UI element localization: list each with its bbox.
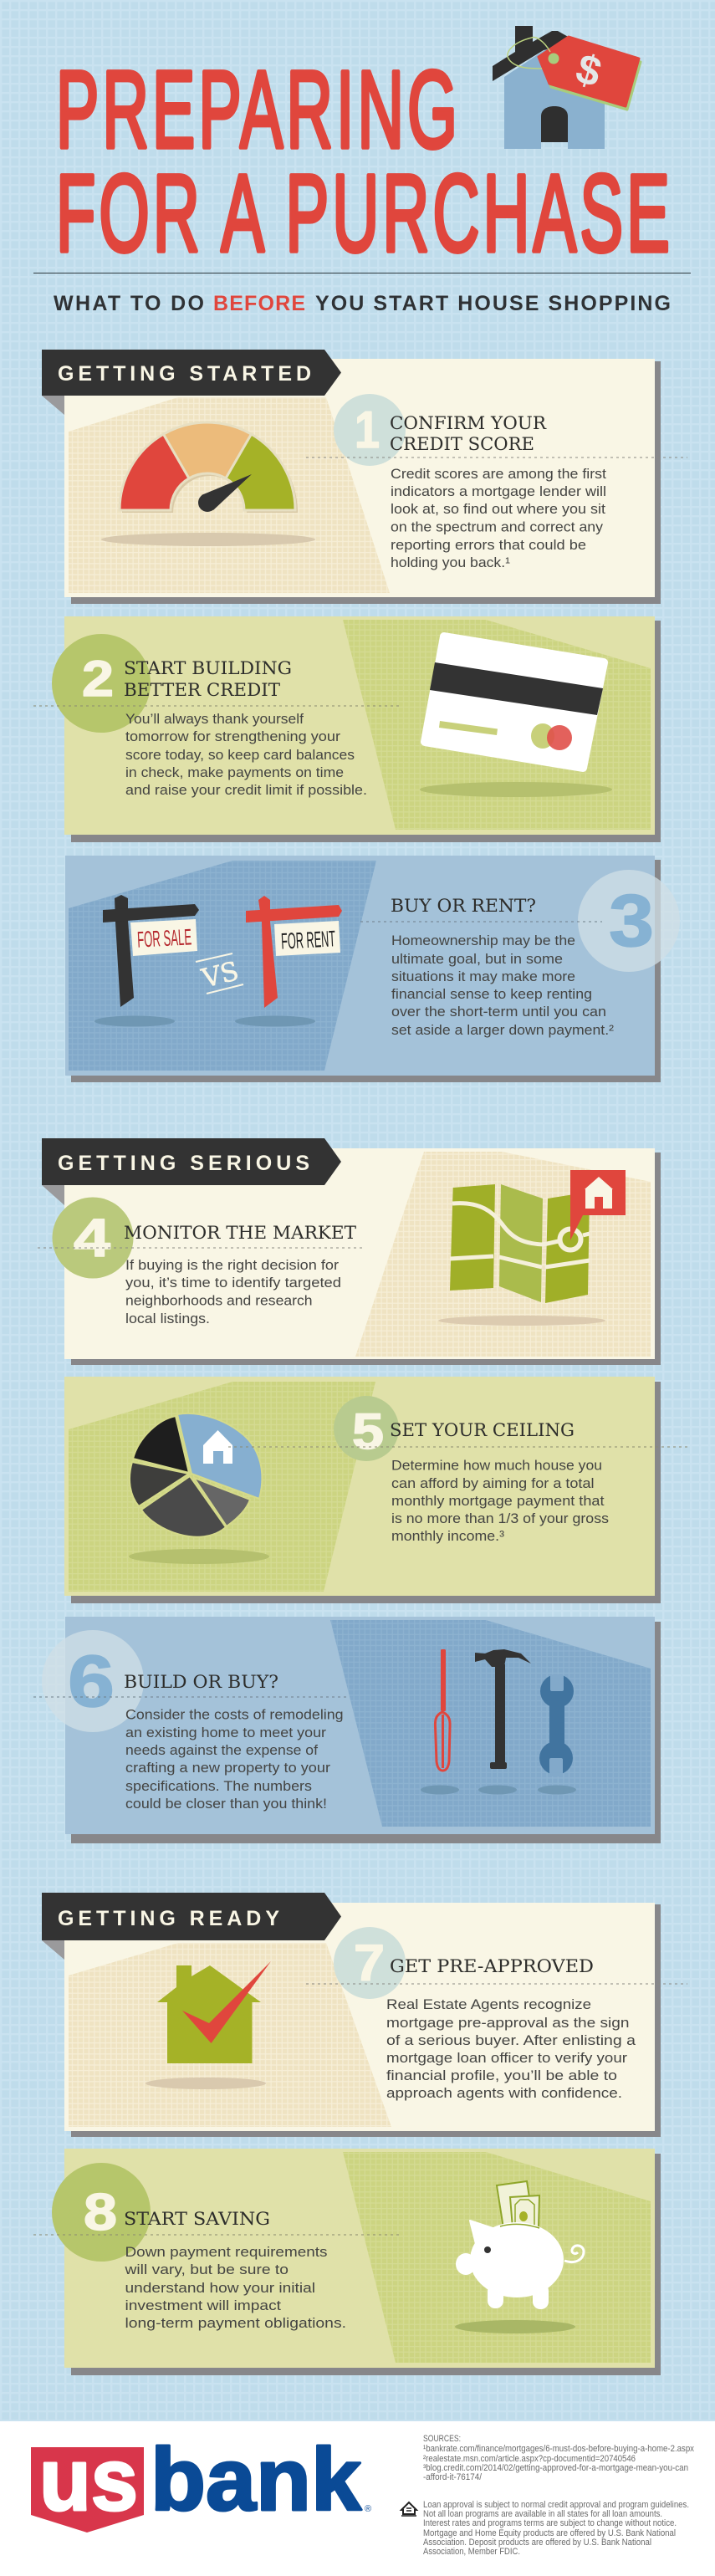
logo: us bank [31, 2430, 371, 2533]
body text 5: Determine how much house you [391, 1457, 602, 1474]
body text 8: will vary, but be sure to [124, 2262, 289, 2277]
number badge 6 [42, 1630, 144, 1732]
number badge 4: 4 [74, 1208, 111, 1268]
body text 1: look at, so find out where you sit [391, 501, 605, 517]
number badge 3: 3 [609, 879, 654, 962]
disclaimer text: Not all loan programs are available in all states for all loan amounts. [423, 2509, 662, 2519]
body text 7: mortgage pre-approval as the sign [386, 2015, 629, 2031]
body text 3: financial sense to keep renting [391, 986, 592, 1002]
heading 5: SET YOUR CEILING [390, 1420, 575, 1440]
disclaimer text: Mortgage and Home Equity products are offered by U.S. Bank National [423, 2528, 676, 2538]
body text 1 [391, 466, 606, 570]
body text 2: tomorrow for strengthening your [125, 728, 340, 744]
number badge 8 [52, 2163, 151, 2262]
panel 3: buy or rent [65, 856, 680, 1082]
body text 5: can afford by aiming for a total [391, 1475, 594, 1491]
body text 1: reporting errors that could be [391, 537, 586, 553]
body text 5: monthly income.³ [391, 1528, 504, 1544]
panel 1: confirm credit score [64, 359, 687, 604]
subtitle: YOU START HOUSE SHOPPING [315, 292, 671, 315]
body text 5 [391, 1457, 609, 1544]
body text 7: of a serious buyer. After enlisting a [386, 2032, 636, 2048]
number badge 7 [334, 1927, 406, 1999]
icon: credit gauge [101, 422, 315, 546]
body text 6: crafting a new property to your [125, 1760, 330, 1776]
body text 3: situations it may make more [391, 969, 575, 984]
logo: us bank: us [39, 2430, 138, 2529]
body text 1: Credit scores are among the first [391, 466, 606, 482]
number badge 7: 7 [354, 1935, 385, 1991]
number badge 1 [334, 394, 406, 466]
panel 2: build better credit [33, 616, 661, 842]
body text 3: ultimate goal, but in some [391, 951, 563, 967]
icon: house with price tag: $ [571, 44, 607, 96]
body text 8: long-term payment obligations. [125, 2315, 346, 2331]
body text 5: is no more than 1/3 of your gross [391, 1510, 609, 1526]
body text 4: neighborhoods and research [125, 1293, 313, 1308]
sources text: SOURCES: [423, 2434, 461, 2444]
number badge 8: 8 [84, 2184, 117, 2241]
panel 5: set your ceiling [64, 1377, 687, 1603]
panel 4: monitor the market [38, 1148, 661, 1365]
icon: piggy bank with money [455, 2181, 584, 2333]
disclaimer text: Association. Deposit products are offered by U.S. Bank National [423, 2538, 651, 2548]
title [56, 48, 673, 274]
disclaimer text: Interest rates and programs terms are subject to change without notice. [423, 2518, 677, 2528]
footer [0, 2421, 715, 2576]
subtitle: WHAT TO DO [54, 292, 204, 315]
body text 2 [125, 711, 367, 798]
section banner: getting serious [42, 1138, 341, 1205]
subtitle: BEFORE [213, 292, 305, 315]
body text 7 [386, 1996, 636, 2101]
icon: for sale and for rent signs: FOR RENT [280, 926, 336, 954]
icon: map with house pin [438, 1170, 626, 1326]
body text 1: on the spectrum and correct any [391, 519, 604, 535]
disclaimer text: Association, Member FDIC. [423, 2547, 520, 2557]
icon: equal housing lender [401, 2502, 416, 2517]
icon: for sale and for rent signs [94, 895, 342, 1027]
icon: house with check mark [146, 1961, 271, 2089]
heading 1: CREDIT SCORE [390, 434, 534, 454]
section banner: getting ready [42, 1893, 341, 1960]
body text 2: and raise your credit limit if possible. [125, 782, 367, 798]
logo: us bank: bank [151, 2430, 362, 2529]
number badge 5 [334, 1396, 399, 1461]
logo: us bank: ® [365, 2504, 371, 2514]
section banner: getting started [42, 350, 341, 415]
body text 2: score today, so keep card balances [125, 747, 355, 763]
body text 6: Consider the costs of remodeling [125, 1706, 344, 1723]
number badge 2: 2 [82, 651, 114, 707]
sources text: -afford-it-76174/ [423, 2472, 483, 2482]
body text 4: local listings. [125, 1311, 210, 1326]
body text 5: monthly mortgage payment that [391, 1493, 605, 1509]
body text 6: an existing home to meet your [125, 1725, 326, 1740]
body text 6 [125, 1706, 344, 1812]
section banner: getting ready: GETTING READY [58, 1907, 279, 1930]
icon: pie chart with house [129, 1413, 269, 1564]
sources text: ²realestate.msn.com/article.aspx?cp-documentid=20740546 [423, 2454, 636, 2464]
body text 8: Down payment requirements [125, 2244, 328, 2260]
body text 4: If buying is the right decision for [125, 1257, 339, 1273]
body text 3: over the short-term until you can [391, 1004, 606, 1020]
sources text [423, 2434, 694, 2482]
body text 7: mortgage loan officer to verify your [386, 2050, 627, 2066]
body text 6: specifications. The numbers [125, 1778, 312, 1794]
body text 8: understand how your initial [125, 2280, 315, 2296]
body text 6: needs against the expense of [125, 1742, 318, 1758]
heading 6: BUILD OR BUY? [124, 1672, 278, 1692]
section banner: getting serious: GETTING SERIOUS [58, 1152, 309, 1175]
body text 1: indicators a mortgage lender will [391, 483, 606, 499]
heading 8: START SAVING [124, 2209, 270, 2229]
body text 8 [124, 2244, 346, 2331]
disclaimer text [423, 2500, 689, 2557]
body text 7: Real Estate Agents recognize [386, 1996, 591, 2012]
heading 2: BETTER CREDIT [124, 680, 280, 700]
section banner: getting started: GETTING STARTED [58, 362, 311, 386]
icon: house with price tag [493, 26, 641, 149]
body text 3: set aside a larger down payment.² [391, 1022, 614, 1038]
heading 7: GET PRE-APPROVED [390, 1956, 594, 1976]
sources text: ³blog.credit.com/2014/02/getting-approved-for-a-mortgage-mean-you-can [423, 2463, 688, 2473]
subtitle [54, 292, 671, 315]
body text 7: approach agents with confidence. [386, 2085, 622, 2101]
body text 6: could be closer than you think! [125, 1796, 327, 1812]
heading 2: START BUILDING [124, 658, 292, 678]
panel 6: build or buy [33, 1617, 661, 1843]
body text 4: you, it’s time to identify targeted [125, 1275, 341, 1291]
number badge 2 [52, 634, 151, 733]
body text 8: investment will impact [125, 2297, 281, 2313]
body text 2: in check, make payments on time [125, 764, 344, 780]
icon: tools [421, 1649, 576, 1795]
number badge 4 [52, 1198, 134, 1278]
heading 3: BUY OR RENT? [391, 896, 536, 916]
icon: for sale and for rent signs: FOR SALE [136, 924, 192, 953]
heading 1 [390, 413, 547, 454]
body text 3: Homeownership may be the [391, 933, 575, 948]
body text 4 [125, 1257, 341, 1326]
body text 1: holding you back.¹ [391, 555, 510, 570]
body text 7: financial profile, you’ll be able to [386, 2067, 617, 2083]
icon: for sale and for rent signs: VS [198, 956, 242, 994]
body text 2: You’ll always thank yourself [125, 711, 304, 727]
number badge 3 [578, 870, 680, 972]
heading 2 [124, 658, 292, 700]
number badge 6: 6 [68, 1641, 115, 1722]
number badge 5: 5 [352, 1403, 384, 1459]
panel 7: get pre-approved [64, 1903, 687, 2137]
body text 3 [391, 933, 614, 1038]
number badge 1: 1 [355, 401, 380, 459]
icon: credit card [420, 636, 612, 797]
panel 8: start saving [33, 2149, 661, 2375]
heading 4: MONITOR THE MARKET [124, 1223, 356, 1243]
heading 1: CONFIRM YOUR [390, 413, 547, 433]
divider line [33, 273, 691, 274]
